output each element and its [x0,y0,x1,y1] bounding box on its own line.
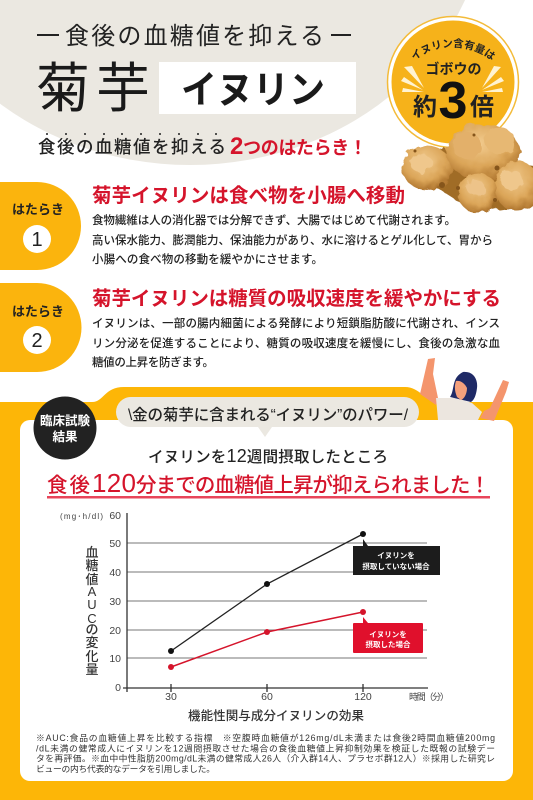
tagline: 食後の血糖値を抑える [65,23,324,50]
badge: 3x burdock: イヌリン含有量は [412,38,495,60]
tab: hataraki 2: はたらき [12,304,64,319]
series: without inulin [168,531,366,654]
footnotes: タを再評価。※血中中性脂肪200mg/dL未満の健常成人26人（介入群14人、プラセボ群12人）※採用した研究レ [36,752,495,764]
section 2 text: イヌリンは、一部の腸内細菌による発酵により短鎖脂肪酸に代謝され、インス [92,316,500,330]
result headline: 120 [92,468,136,498]
y axis ticks: 50 [109,538,121,550]
footnotes: /dL未満の健常成人にイヌリンを12週間摂取させた場合の食後血糖値上昇抑制効果を検証した既報の試験デー [36,742,495,754]
footnotes: ※AUC:食品の血糖値上昇を比較する指標 ※空腹時血糖値が126mg/dL未満または食後2時間血糖値200mg [36,732,495,743]
tab: hataraki 1: 1 [31,229,43,251]
subtitle: 2つのはたらき！ [230,133,367,160]
badge: 3x burdock [386,16,520,148]
x axis ticks [165,691,372,703]
x axis ticks: 30 [165,691,177,703]
section 1 text: 小腸への食べ物の移動を緩やかにさせます。 [92,252,323,266]
y axis ticks: 0 [115,682,121,694]
x axis ticks: 120 [354,691,372,703]
badge: clinical trial [34,396,96,460]
speech bubble: \金の菊芋に含まれる“イヌリン”のパワー/ [128,406,409,424]
subtitle [38,133,367,160]
x axis ticks: 60 [261,691,273,703]
callout: without inulin: イヌリンを [377,551,415,560]
result intro: イヌリンを12週間摂取したところ [148,446,388,466]
section 1 text: 菊芋イヌリンは食べ物を小腸へ移動 [92,184,405,207]
background: beige arc [0,0,487,165]
header [36,23,367,160]
callout: with inulin: 摂取した場合 [366,639,411,649]
yellow panel [0,387,533,800]
white panel [20,420,513,781]
title: inulin box [159,62,356,114]
badge: clinical trial: 臨床試験 [40,413,90,428]
badge: 3x burdock: 倍 [470,94,494,121]
y axis ticks: 30 [109,596,121,608]
y axis ticks: 10 [109,653,121,665]
title: inulin box: イヌリン [181,70,325,112]
image: Jerusalem artichokes [402,124,533,213]
chart caption: 機能性関与成分イヌリンの効果 [188,708,364,723]
illustration: woman cheering [420,358,509,421]
callout: with inulin: イヌリンを [369,630,407,639]
series: with inulin [168,609,366,670]
badge: 3x burdock: 約 [413,94,437,121]
result headline: 分までの血糖値上昇が抑えられました！ [136,474,490,497]
badge: clinical trial: 結果 [52,429,78,444]
tab: hataraki 2 [0,283,82,372]
section 2 text: 糖値の上昇を防ぎます。 [92,355,214,369]
badge: 3x burdock: ゴボウの [426,61,482,77]
result headline: 食後 [47,474,90,497]
y axis ticks: 40 [109,567,121,579]
result headline [47,468,490,498]
badge: 3x burdock: 3 [439,72,467,130]
speech bubble [116,397,419,437]
section 2 text: 菊芋イヌリンは糖質の吸収速度を緩やかにする [92,287,501,310]
section 2 text: リン分泌を促進することにより、糖質の吸収速度を緩慢にし、食後の急激な血 [92,336,500,350]
title: kikuimo: 菊芋 [36,59,150,119]
section 1 text: 高い保水能力、膨潤能力、保油能力があり、水に溶けるとゲル化して、胃から [92,233,493,247]
tab: hataraki 2: 2 [31,330,43,352]
line chart [60,510,449,703]
callout: without inulin: 摂取していない場合 [362,561,430,571]
callout: without inulin [353,539,440,575]
y axis ticks: 60 [109,510,121,522]
tab: hataraki 1 [0,182,81,270]
section 1 text: 食物繊維は人の消化器では分解できず、大腸ではじめて代謝されます。 [92,213,456,227]
section 2 text [92,287,503,369]
section 1 text [92,184,496,266]
y axis ticks: 20 [109,625,121,637]
time label: 時間（分） [409,692,449,702]
footnotes: ビューの内ち代表的なデータを引用しました。 [36,763,215,774]
callout: with inulin [353,617,423,653]
y axis ticks [109,510,121,694]
unit label: (mg･h/dl) [60,512,103,521]
tab: hataraki 1: はたらき [12,202,64,217]
y axis title: 血糖値AUCの変化量 [85,545,99,677]
subtitle: 食後の血糖値を抑える [38,137,226,157]
